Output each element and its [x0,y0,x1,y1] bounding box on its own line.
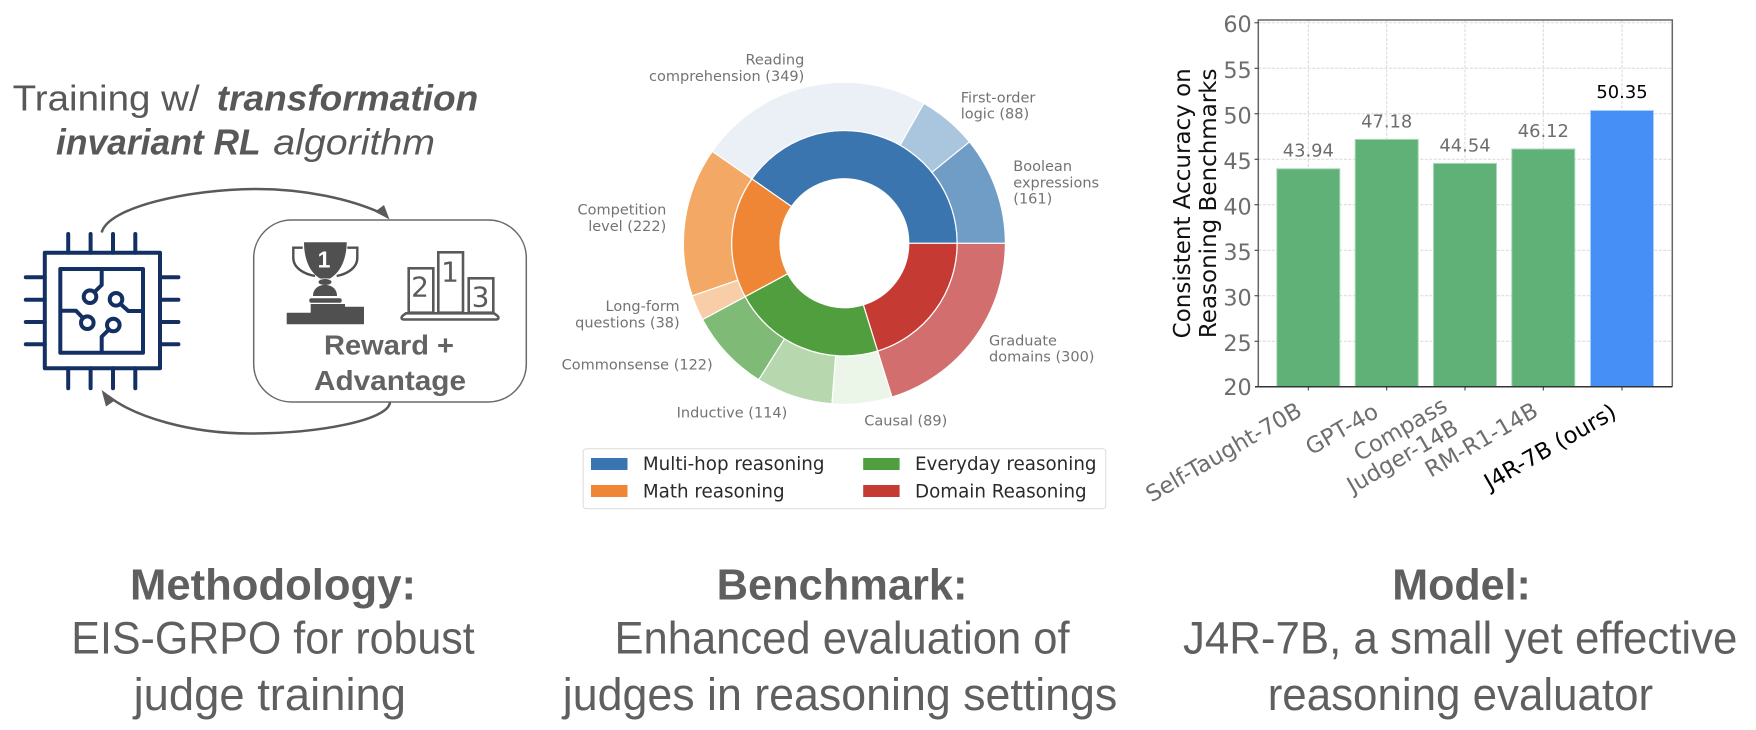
sunburst slice labels: Inductive (114) [677,405,787,421]
y axis tick labels: 45 [1223,149,1252,175]
axes frame and ticks [1254,20,1672,390]
y axis title: Reasoning Benchmarks [1196,68,1222,338]
heading: training with transformation invariant RL algorithm: invariant RL [56,122,261,163]
y axis tick labels: 40 [1223,194,1252,220]
bar value labels: 47.18 [1361,111,1412,132]
text: reward plus advantage: Advantage [314,365,466,396]
arrow: reward back to chip [102,390,390,434]
icon: ranking podium: 1 [441,256,459,288]
text: reward plus advantage [314,329,466,396]
heading: training with transformation invariant RL algorithm: Training w/ [13,78,200,119]
sunburst slice labels: Reading [745,53,804,69]
x axis model labels: RM-R1-14B [1421,398,1543,483]
x axis model labels: Self-Taught-70B [1141,398,1306,508]
heading: training with transformation invariant RL algorithm: transformation [217,78,478,119]
sunburst slice labels: (161) [1013,192,1052,208]
caption: model: Model: [1392,560,1531,609]
caption: methodology: judge training [132,669,406,720]
icon: processor chip [26,234,178,388]
y axis tick labels: 50 [1223,104,1252,130]
sunburst slice labels: Graduate [989,333,1057,349]
sunburst slice labels: level (222) [588,219,666,235]
caption: benchmark: judges in reasoning settings [561,669,1117,720]
legend: Domain Reasoning [915,481,1087,502]
caption: methodology [71,560,475,720]
y axis title [1170,68,1222,338]
x axis model labels: Compass [1350,393,1452,467]
sunburst slice labels: expressions [1013,175,1099,191]
sunburst slice labels: Long-form [606,299,680,315]
x axis model labels: GPT-4o [1301,399,1383,461]
icon: ranking podium: 3 [472,280,489,314]
y axis tick labels: 20 [1223,375,1252,401]
legend [583,449,1106,509]
x axis model labels: J4R-7B (ours) [1478,399,1621,497]
caption: benchmark [561,560,1117,720]
inner ring: main categories [732,131,957,356]
icon: trophy on podium: 1 [318,246,331,272]
sunburst slice labels: domains (300) [989,350,1094,366]
bar value labels: 46.12 [1518,121,1569,142]
y axis tick labels [1223,12,1252,401]
caption: benchmark: Enhanced evaluation of [614,612,1070,663]
x axis model labels [1141,393,1621,508]
y axis tick labels: 25 [1223,331,1252,357]
legend: Everyday reasoning [915,454,1097,475]
icon: ranking podium [402,252,498,320]
icon: trophy on podium [287,242,364,324]
sunburst slice labels: Competition [578,202,666,218]
caption: methodology: Methodology: [130,560,416,609]
panel: methodology diagram [13,78,526,433]
caption: model: reasoning evaluator [1268,669,1653,720]
caption: benchmark: Benchmark: [717,560,968,609]
heading: training with transformation invariant RL algorithm: algorithm [273,122,435,163]
chart: benchmark sunburst [562,53,1106,509]
caption: methodology: EIS-GRPO for robust [71,612,475,663]
y axis title: Consistent Accuracy on [1170,68,1196,338]
sunburst slice labels: Boolean [1013,159,1072,175]
bar value labels: 43.94 [1283,141,1334,162]
legend: Math reasoning [643,481,785,502]
sunburst slice labels: Causal (89) [864,413,947,429]
text: reward plus advantage: Reward + [324,329,454,360]
caption: model: J4R-7B, a small yet effective [1183,612,1737,663]
sunburst slice labels: questions (38) [575,315,680,331]
sunburst slice labels: logic (88) [961,107,1029,123]
legend: Multi-hop reasoning [643,454,825,475]
x axis model labels: Judger-14B [1341,415,1463,500]
y axis tick labels: 30 [1223,286,1252,312]
icon: ranking podium: 2 [411,270,429,304]
bars [1277,110,1654,387]
bar value labels: 50.35 [1596,82,1648,103]
panel: reward and advantage box [254,220,526,402]
bar value labels: 44.54 [1439,135,1491,156]
y axis tick labels: 35 [1223,240,1252,266]
y axis tick labels: 60 [1223,12,1252,38]
caption: model [1183,560,1737,720]
heading: training with transformation invariant RL algorithm [13,78,478,163]
chart: accuracy bar chart [1141,12,1672,508]
y axis tick labels: 55 [1223,58,1252,84]
sunburst slice labels: First-order [961,91,1035,107]
outer ring: subcategories [683,82,1005,404]
sunburst slice labels [562,53,1099,429]
arrow: chip to reward [102,189,389,232]
sunburst slice labels: comprehension (349) [649,69,804,85]
sunburst slice labels: Commonsense (122) [562,358,713,374]
bar value labels [1283,82,1648,162]
